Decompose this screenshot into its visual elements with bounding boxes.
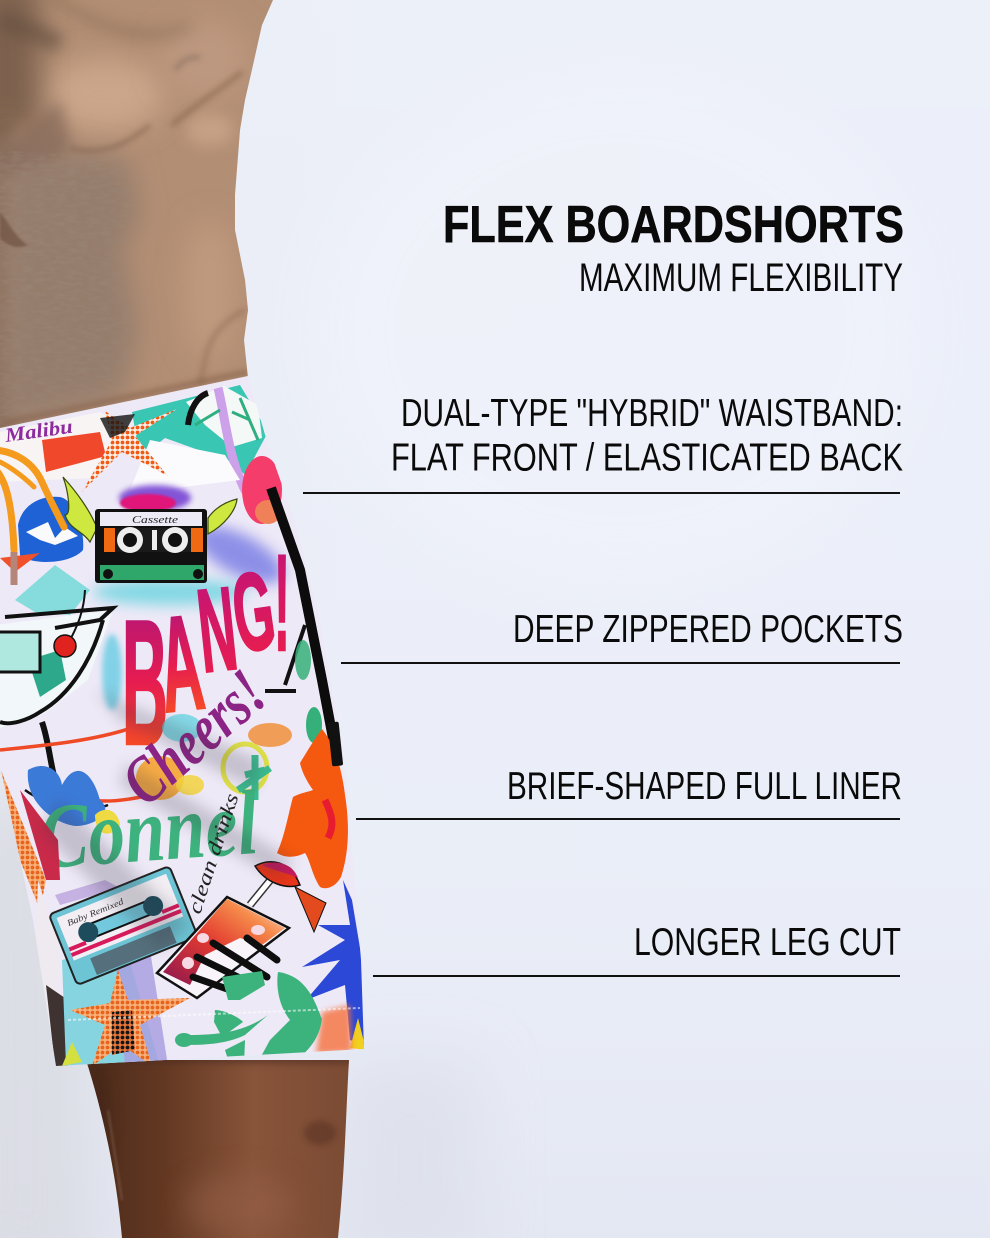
BANG lettering: A <box>152 586 210 741</box>
blue flower under glass <box>28 766 120 834</box>
blue palm <box>302 880 366 1050</box>
pocket zipper <box>271 488 338 765</box>
fabric fold shadows <box>40 690 293 950</box>
lips <box>255 862 326 932</box>
orange drawcord <box>0 450 64 585</box>
zipper pull <box>328 721 343 766</box>
leg <box>87 1060 349 1238</box>
waistband print: teal and palm <box>0 385 268 496</box>
chest hair <box>0 100 140 440</box>
orange hem corner <box>316 1005 352 1054</box>
watercolor wash behind cassette <box>92 485 292 710</box>
retro cassette tape <box>49 866 198 985</box>
signature scribble: clean drinks <box>184 791 243 917</box>
feature: hybrid waistband <box>303 392 903 494</box>
yellow and orange watercolor spots behind Cheers <box>136 714 292 800</box>
martini glass <box>0 590 113 809</box>
torso <box>0 0 280 440</box>
wings <box>63 477 237 542</box>
bottom orange starfish <box>70 970 190 1066</box>
hibiscus flower <box>277 729 348 888</box>
BANG lettering: G <box>225 548 282 676</box>
muscle shading <box>0 0 250 440</box>
cassette tape patch <box>95 509 207 583</box>
green leaves by zipper <box>295 640 322 743</box>
boardshorts <box>0 370 370 1070</box>
cassette label text: Cassette <box>132 515 179 526</box>
dessert square <box>157 878 289 998</box>
BANG lettering <box>126 554 286 746</box>
orange dotted panel at left <box>0 768 70 1066</box>
orange starfish <box>82 409 177 492</box>
waistband print: teal and palm: Malibu <box>3 416 74 447</box>
red-orange streaks <box>0 725 150 801</box>
BANG lettering: N <box>192 563 243 698</box>
cassette label: Baby Remixed <box>66 896 125 928</box>
flamingo leg stand <box>265 625 305 691</box>
blue flower at waist <box>0 497 90 615</box>
Cheers script: Cheers! <box>108 656 280 819</box>
feature: leg cut: LONGER LEG CUT <box>634 921 901 964</box>
hem stitch line <box>68 1008 360 1020</box>
creases <box>0 57 248 424</box>
green script lettering: Connel <box>36 771 261 888</box>
flamingo pink shape <box>242 456 282 524</box>
title: FLEX BOARDSHORTS <box>443 196 904 254</box>
boardshorts: ! <box>274 527 290 680</box>
green hibiscus <box>175 971 322 1066</box>
pastel block lower-left <box>55 880 168 1066</box>
BANG lettering: B <box>122 583 168 782</box>
